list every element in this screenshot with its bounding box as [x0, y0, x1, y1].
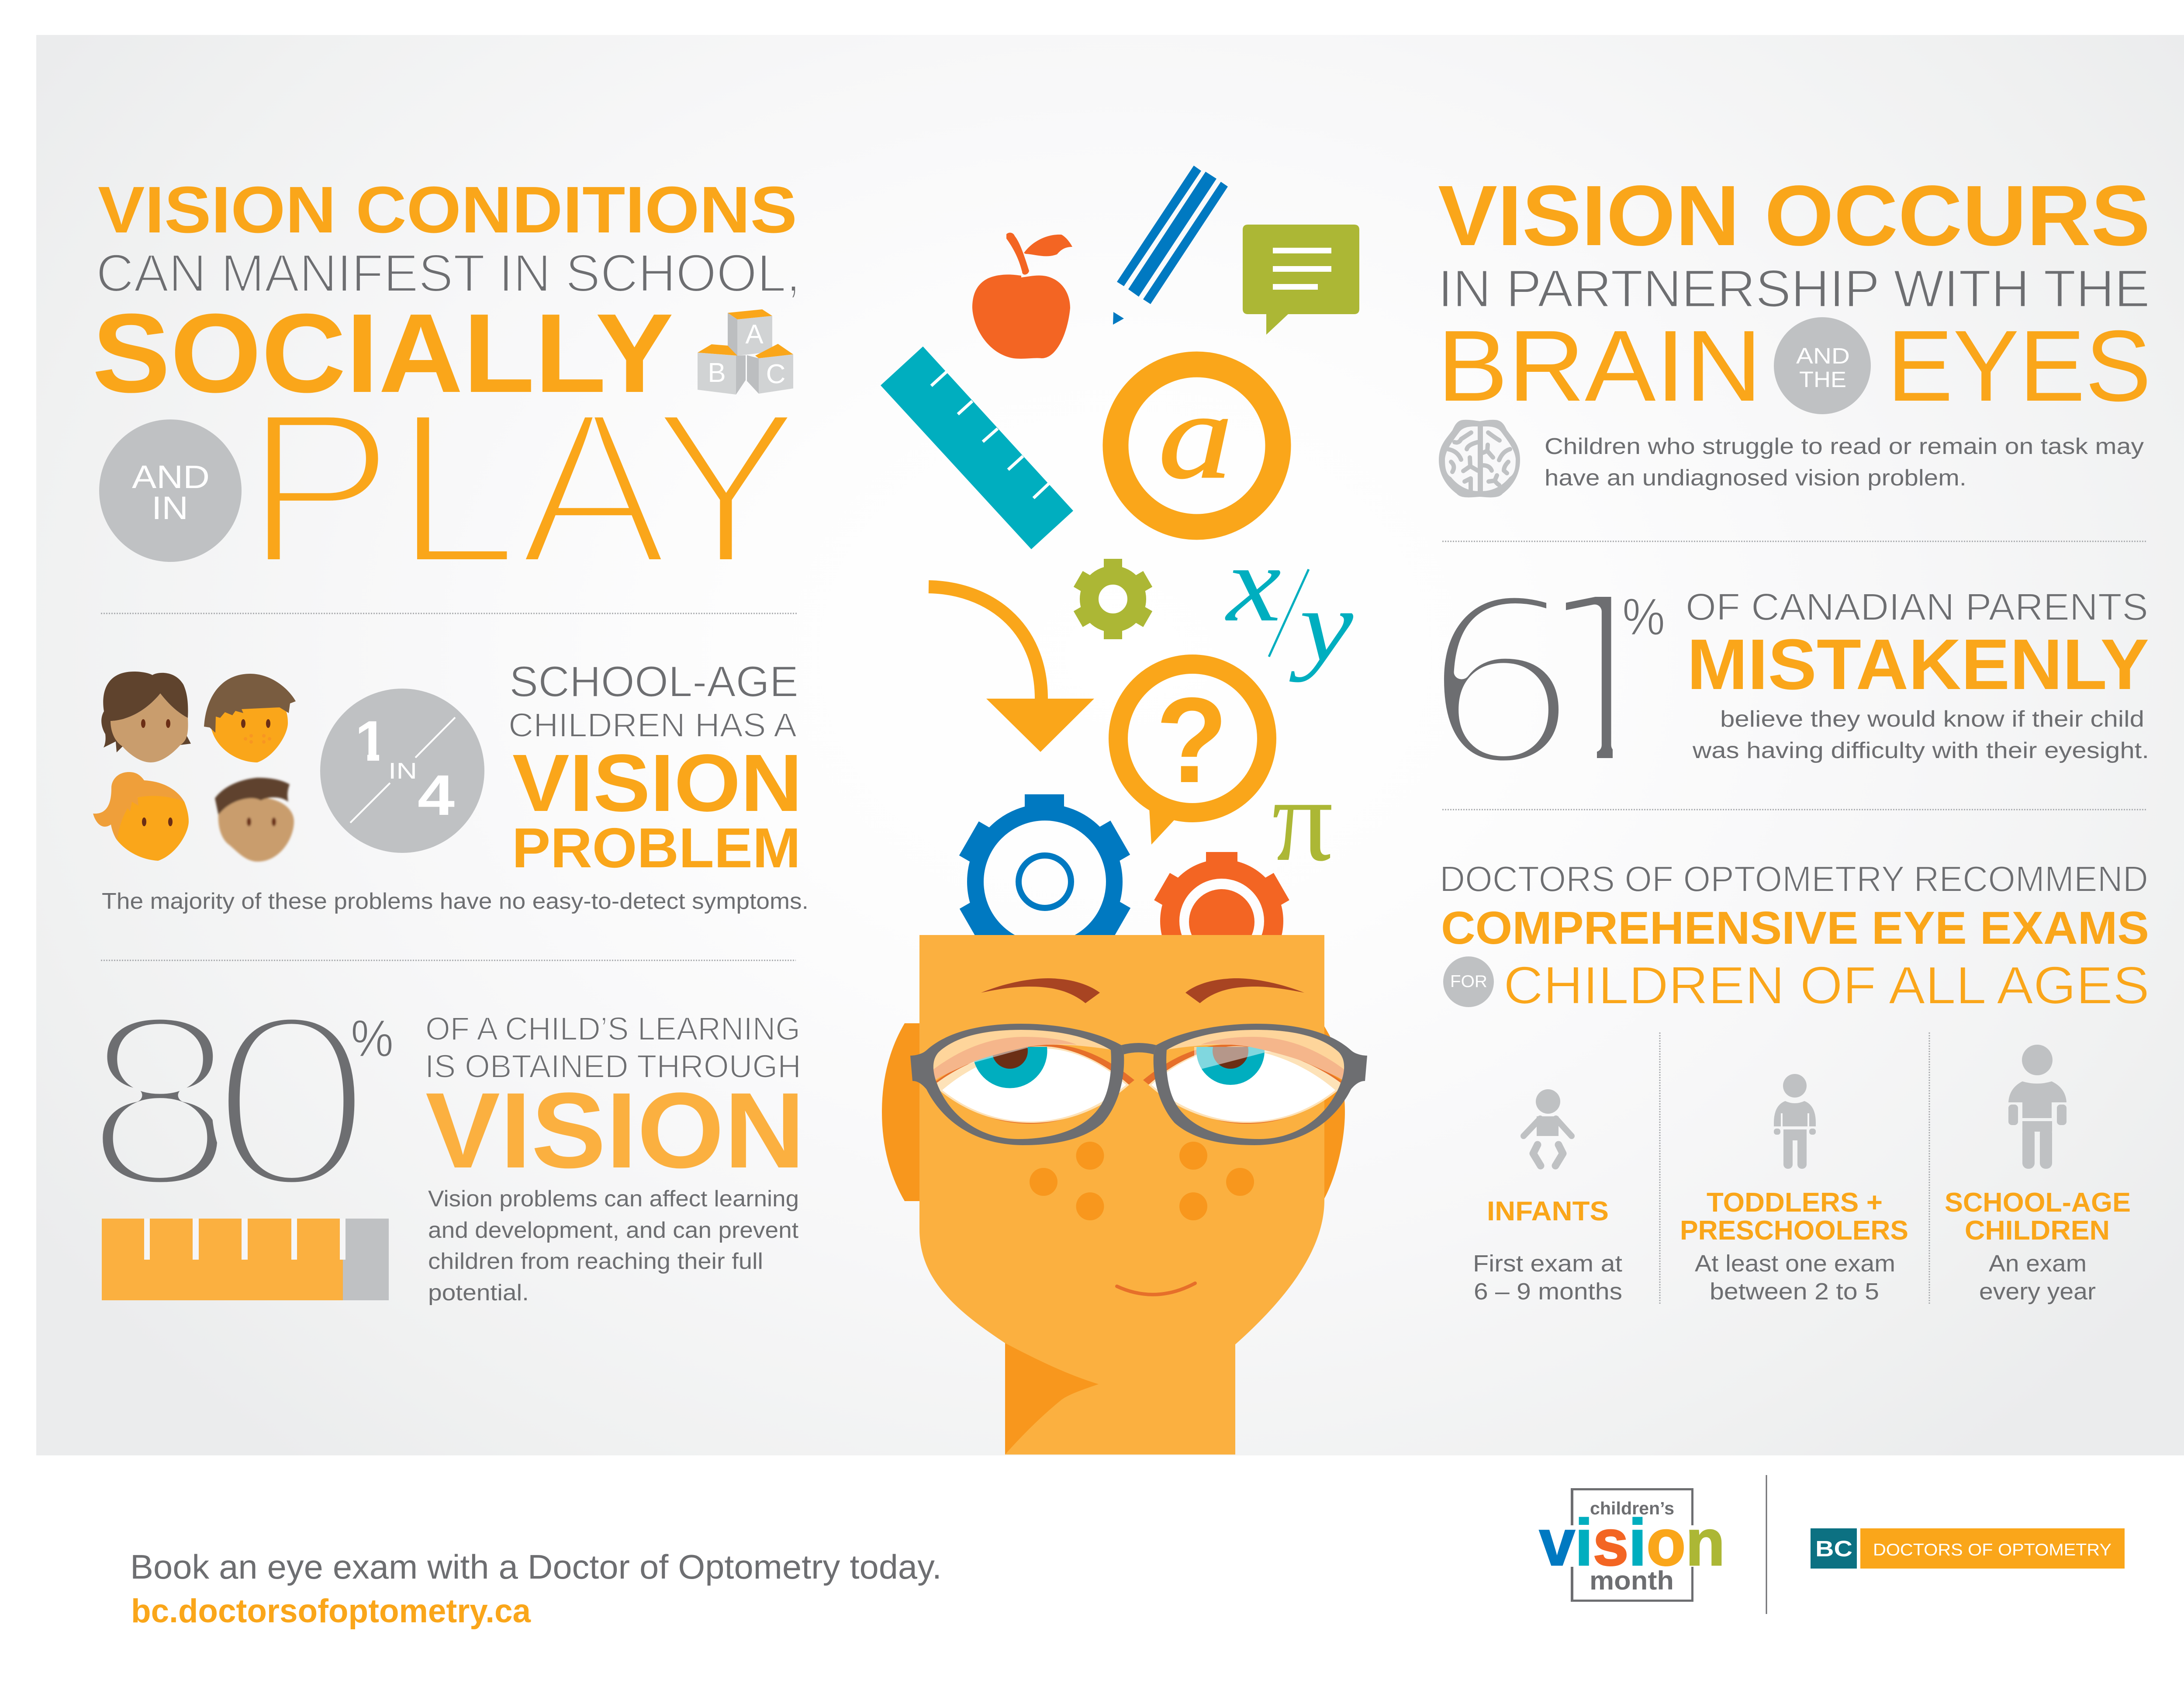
label: school-age children: SCHOOL-AGE: [1945, 1188, 2131, 1218]
text: vision problems can affect learning: children from reaching their full: [428, 1249, 763, 1274]
text: believe they would know: believe they would know if their child: [1720, 707, 2144, 732]
illustration: child's head with glasses: [882, 935, 1367, 1455]
heading: of a child's learning: IS OBTAINED THROUGH: [425, 1048, 801, 1084]
icon: alphabet blocks: [698, 309, 793, 395]
icon: four children faces: [93, 672, 296, 862]
face: girl with brown hair: [101, 672, 191, 762]
text: an exam every year: An exam: [1989, 1250, 2087, 1277]
heading: brain: BRAIN: [1437, 309, 1762, 422]
logo: bc doctors of optometry: [1811, 1528, 2125, 1569]
text: first exam: 6 – 9 months: [1474, 1278, 1622, 1305]
icon: blue gear: [959, 794, 1130, 951]
column: infants: [1473, 1089, 1622, 1305]
heading: doctors of optometry recommend: DOCTORS OF OPTOMETRY RECOMMEND: [1440, 859, 2148, 899]
panel: vision occurs: [1437, 168, 2151, 497]
icon: x over y: y: [1289, 569, 1353, 682]
stat: 61: 1: [1526, 542, 1679, 822]
column: school-age children: [1945, 1045, 2131, 1305]
text: an exam every year: every year: [1979, 1278, 2096, 1305]
text: children who struggle: have an undiagnosed vision problem.: [1545, 465, 1966, 491]
icon: brain: [1439, 420, 1520, 497]
logo: children's vision month: vision: [1539, 1506, 1725, 1579]
panel: vision conditions: [92, 173, 801, 610]
label: infants: INFANTS: [1487, 1196, 1609, 1226]
badge: for: [1443, 956, 1494, 1007]
icon: question bubble: ?: [1156, 672, 1228, 808]
icon: pi: π: [1272, 754, 1333, 886]
text: vision problems can affect learning: [428, 1186, 799, 1306]
badge: 1 in 4: 1: [355, 709, 387, 773]
face: boy with freckles: [204, 674, 296, 762]
heading: vision occurs: VISION OCCURS: [1438, 168, 2150, 263]
text: vision problems can affect learning: Vision problems can affect learning: [428, 1186, 799, 1212]
heading: vision conditions: VISION CONDITIONS: [98, 173, 797, 246]
heading: play: PLAY: [245, 366, 801, 610]
text: believe they would know: was having difficulty with their eyesight.: [1692, 738, 2149, 763]
badge: and in: AND: [132, 459, 210, 495]
badge: and the: [1774, 317, 1871, 414]
label: toddlers and preschoolers: TODDLERS +: [1707, 1188, 1883, 1218]
text: majority of problems: The majority of these problems have no easy-to-detect symptoms.: [102, 889, 809, 914]
panel: sixty-one percent: [1418, 542, 2149, 822]
stat: 80: 8: [77, 969, 243, 1241]
freckles: [1030, 1142, 1254, 1220]
icon: small green gear: [1074, 559, 1152, 639]
icon: apple: [972, 233, 1072, 359]
logo: children's vision month: month: [1590, 1566, 1674, 1595]
label: school-age children: [1945, 1188, 2131, 1246]
illustration: school icons: [881, 166, 1359, 973]
text: vision problems can affect learning: potential.: [428, 1280, 529, 1306]
mouth: [1117, 1283, 1195, 1295]
heading: school-age children has a vision problem: SCHOOL-AGE: [509, 657, 798, 706]
icon: infant: [1524, 1089, 1572, 1166]
face and neck: [919, 935, 1324, 1455]
icon: alphabet blocks: B: [708, 358, 726, 388]
stat: 61: [1418, 542, 1679, 822]
text: first exam: [1473, 1250, 1622, 1305]
heading: comprehensive eye exams: COMPREHENSIVE EYE EXAMS: [1441, 902, 2149, 954]
logo: children's vision month: [1539, 1488, 1725, 1602]
text: book an eye exam: Book an eye exam with a Doctor of Optometry today.: [130, 1548, 942, 1586]
label: toddlers and preschoolers: [1680, 1188, 1908, 1246]
heading: school-age children has a vision problem: PROBLEM: [512, 817, 801, 880]
heading: of canadian parents mistakenly: OF CANADIAN PARENTS: [1686, 586, 2148, 628]
panel: eighty percent: [77, 969, 805, 1306]
heading: eyes: EYES: [1887, 309, 2151, 422]
logo: children's vision month: children’s: [1590, 1498, 1674, 1518]
icon: question bubble: [1118, 664, 1267, 845]
badge: and the: THE: [1799, 367, 1846, 392]
heading: can manifest in school: CAN MANIFEST IN SCHOOL,: [96, 243, 801, 303]
heading: school-age children has a vision problem: CHILDREN HAS A: [508, 707, 797, 744]
icon: orange gear: [1154, 852, 1289, 973]
stat: 80: [77, 969, 382, 1241]
icon: ruler: [881, 346, 1073, 549]
stat: 80: 0: [201, 969, 382, 1241]
icon: x over y: x: [1224, 523, 1281, 644]
label: toddlers and preschoolers: PRESCHOOLERS: [1680, 1216, 1908, 1246]
stat: percent sign: %: [1622, 588, 1665, 646]
heading: in partnership with the: IN PARTNERSHIP WITH THE: [1438, 259, 2150, 318]
chart: ruler 80 percent: [102, 1219, 389, 1300]
heading: of a child's learning: [425, 1011, 805, 1191]
icon: speech bubble: [1243, 225, 1359, 335]
icon: alphabet blocks: C: [766, 359, 785, 389]
icon: at symbol: a: [1158, 367, 1233, 504]
label: school-age children: CHILDREN: [1965, 1216, 2110, 1246]
icon: x over y: [1224, 523, 1353, 682]
badge: 1 in 4: 4: [418, 763, 455, 827]
heading: of a child's learning: OF A CHILD’S LEARNING: [425, 1011, 800, 1047]
panel: recommendation: [1440, 859, 2149, 1305]
heading: of a child's learning: VISION: [425, 1070, 805, 1191]
stat: 61: 6: [1418, 547, 1583, 819]
icon: pencil: [1113, 166, 1228, 325]
logo: bc doctors of optometry: BC: [1815, 1536, 1852, 1561]
glasses: [910, 1024, 1367, 1145]
face: girl with ponytail: [93, 772, 189, 861]
link text: website: bc.doctorsofoptometry.ca: [131, 1593, 531, 1630]
neck shadow: [1005, 1343, 1099, 1455]
text: at least one exam: [1695, 1250, 1895, 1305]
icon: school-age child: [2008, 1045, 2067, 1169]
heading: socially: SOCIALLY: [92, 291, 674, 416]
arrow: curved into head: [929, 587, 1094, 752]
badge: 1 in 4: [320, 689, 484, 853]
column: toddlers and preschoolers: [1680, 1074, 1908, 1305]
text: children who struggle: Children who struggle to read or remain on task may: [1545, 434, 2144, 459]
text: an exam every year: [1979, 1250, 2096, 1305]
ear: right: [1324, 1026, 1345, 1198]
face: boy with dark hair: [215, 778, 294, 862]
text: at least one exam: At least one exam: [1695, 1250, 1895, 1277]
text: first exam: First exam at: [1473, 1250, 1622, 1277]
badge: and the: AND: [1796, 343, 1850, 368]
text: believe they would know: [1692, 707, 2149, 763]
eyebrows: [981, 978, 1304, 1003]
icon: toddler: [1774, 1074, 1816, 1169]
heading: of canadian parents mistakenly: MISTAKENLY: [1687, 624, 2149, 704]
eye: right: [1143, 1030, 1344, 1124]
icon: at symbol: [1116, 364, 1278, 527]
badge: and in: IN: [152, 490, 188, 526]
eye: left: [933, 1030, 1134, 1124]
heading: school-age children has a vision problem: [508, 657, 802, 880]
text: at least one exam: between 2 to 5: [1710, 1278, 1879, 1305]
heading: children of all ages: CHILDREN OF ALL AGES: [1503, 956, 2149, 1015]
text: vision problems can affect learning: and development, and can prevent: [428, 1218, 799, 1243]
heading: school-age children has a vision problem: VISION: [512, 738, 802, 828]
badge: and in: [99, 419, 242, 562]
icon: alphabet blocks: A: [745, 319, 764, 350]
badge: for: FOR: [1450, 972, 1487, 991]
stat: percent sign: %: [351, 1009, 394, 1068]
ear: left: [882, 1023, 919, 1201]
heading: of canadian parents mistakenly: [1686, 586, 2149, 704]
panel: one in four: [93, 657, 809, 914]
badge: 1 in 4: IN: [388, 758, 417, 784]
text: children who struggle: [1545, 434, 2144, 491]
footer: [130, 1475, 2125, 1630]
logo: bc doctors of optometry: DOCTORS OF OPTOMETRY: [1873, 1541, 2111, 1559]
